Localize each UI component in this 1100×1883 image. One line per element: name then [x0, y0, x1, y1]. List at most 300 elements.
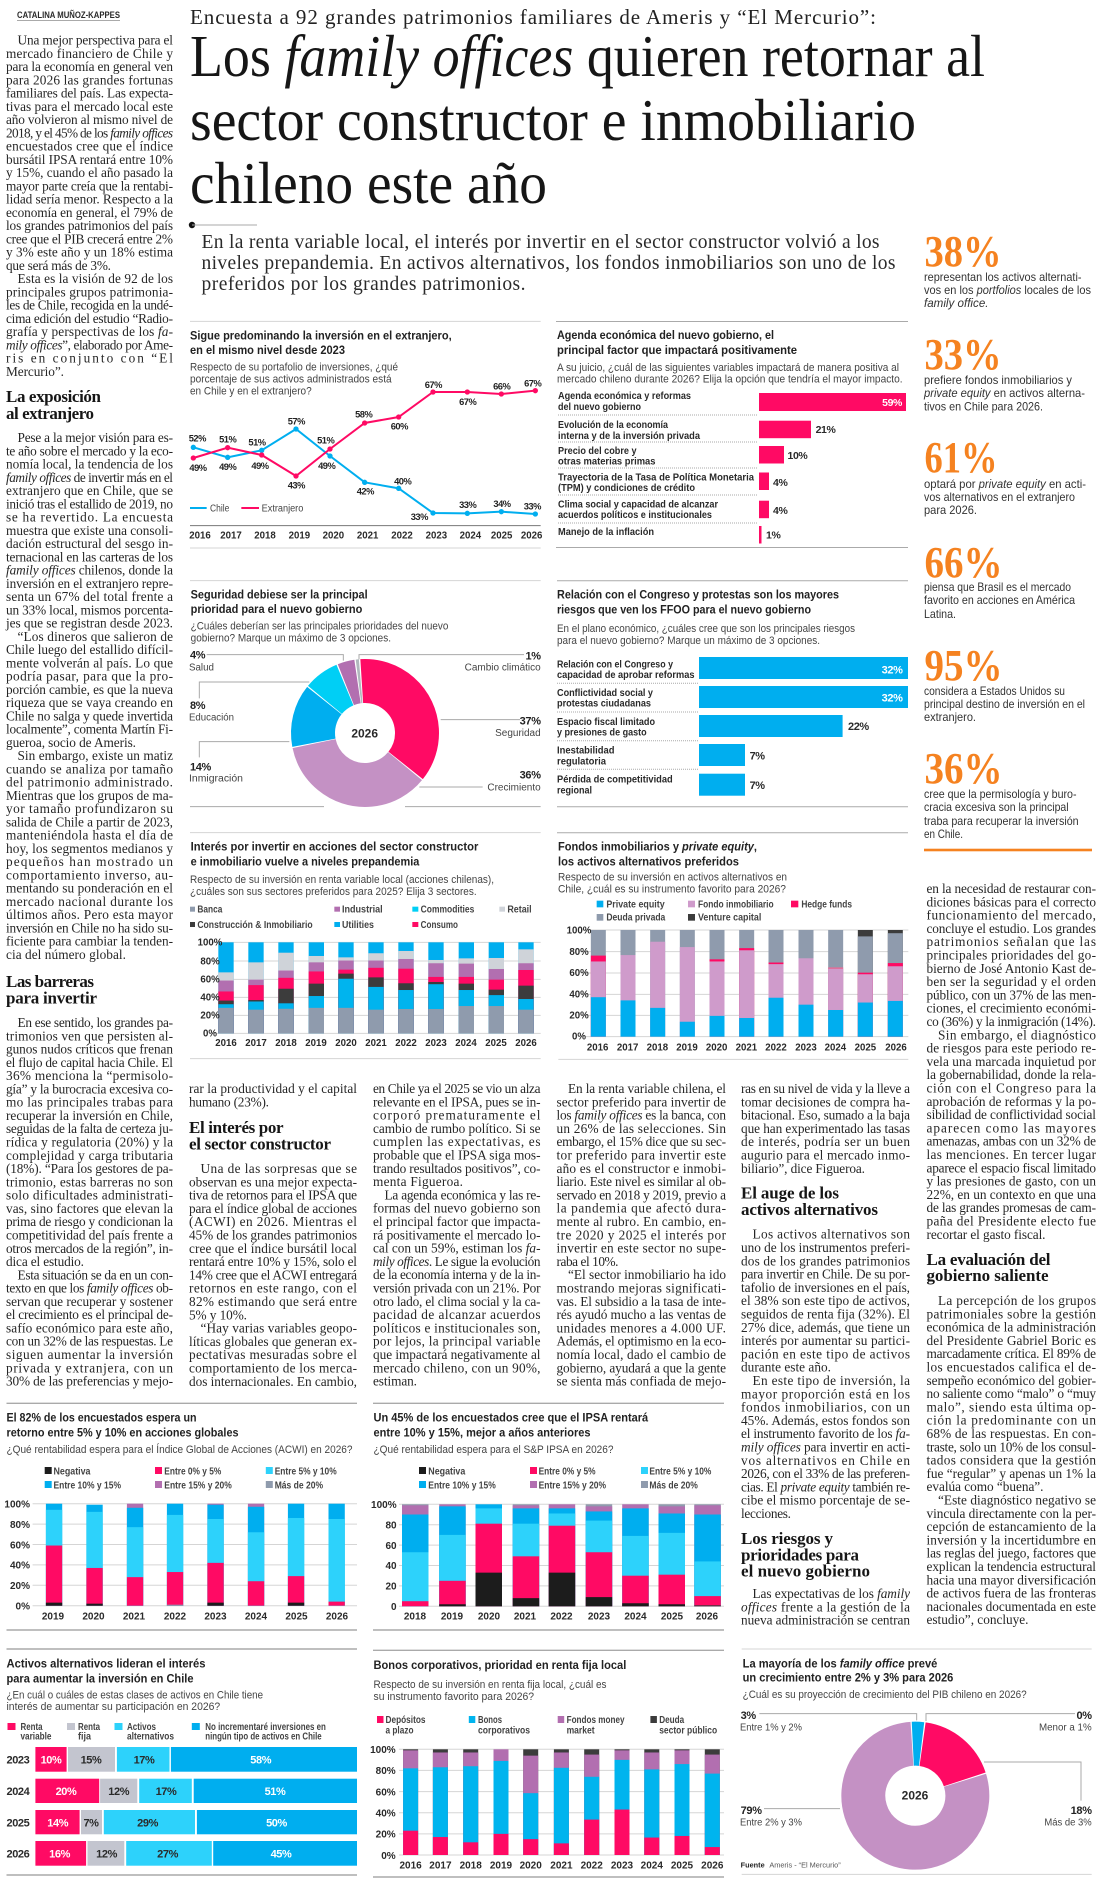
text block: column six top — [926, 881, 1097, 1242]
row labels: Manejo de la inflación — [558, 527, 654, 538]
text block: column four: raba el 10%. — [556, 1254, 618, 1269]
bars 2023: 10% — [41, 1754, 62, 1766]
text block: outgoing government: los encuestados califica el de- — [926, 1360, 1096, 1374]
panel: donut GDP growth: 2026 — [902, 1789, 929, 1803]
title: Los family offices quieren retornar al — [190, 23, 985, 89]
donut labels: 18% — [1071, 1805, 1092, 1817]
legend: Más de 20% — [275, 1480, 323, 1492]
text block: column three: trando resultados positivos”, co- — [373, 1161, 540, 1176]
year axis — [189, 530, 543, 541]
axis labels: 100% — [567, 925, 592, 936]
values: 59% — [882, 397, 903, 409]
text block: column four: tre 2020 y 2025 el interés por — [556, 1227, 727, 1242]
axis labels: 40% — [376, 1808, 396, 1820]
text block: column four: mostrando mejoras significati- — [556, 1280, 726, 1296]
leader lines — [759, 1714, 1081, 1809]
text block: alternative assets: mayor proporción está en los — [741, 1386, 910, 1401]
text block: column three: corporó prematuramente el — [373, 1108, 541, 1123]
legend: sector público — [659, 1726, 717, 1737]
axis labels: 2019 — [490, 1861, 513, 1872]
text block: outgoing government: económica de la administración — [926, 1320, 1096, 1335]
text block: column four: “El sector inmobiliario ha ido — [568, 1267, 726, 1282]
text block: exposure: inversión en Chile no ha sido su- — [6, 920, 173, 935]
text block: exposure: dación estructural del sesgo in- — [6, 536, 173, 551]
year axis: 2025 — [491, 530, 513, 541]
text block: intro column: cree que el PIB crecerá entre 2% — [6, 231, 173, 246]
axis labels: 2023 — [795, 1042, 817, 1053]
panel: ACWI expected return stacked bars: El 82% de los encuestados espera un — [6, 1410, 196, 1424]
legend: Negativa — [428, 1466, 466, 1478]
text block: outgoing government: las reglas del juego, factores que — [926, 1546, 1096, 1561]
text block: alternative assets: el 38% son este tipo de activos, — [741, 1293, 910, 1308]
row labels: Precio del cobre y — [558, 446, 637, 457]
donut labels: 36% — [520, 770, 541, 782]
text block: intro column: cima edición del estudio “Radio- — [6, 311, 173, 326]
text block: exposure: podría pasar, para que la pro- — [6, 668, 173, 684]
text block: barriers: texto en que los family offices ob- — [6, 1281, 173, 1296]
text block: column six top: diciones básicas para el correcto — [926, 894, 1096, 909]
heading: Los riesgos y prioridades — [741, 1529, 870, 1580]
text block: column three: La agenda económica y las re- — [384, 1187, 540, 1202]
text block: sector interest: dos internacionales. En cambio, — [189, 1374, 357, 1389]
legend: Venture capital — [698, 913, 762, 924]
stat 66%: piensa que Brasil es el mercado — [924, 580, 1071, 594]
donut labels: 8% — [190, 700, 206, 712]
panel: donut GDP growth — [740, 1649, 1092, 1874]
text block: column four: Además, el optimismo en la eco- — [556, 1334, 726, 1349]
bars 2023: 17% — [134, 1754, 155, 1766]
text block: alternative assets: uno de los instrumentos preferi- — [741, 1240, 910, 1255]
axis labels: 80% — [569, 947, 589, 958]
panel: IPSA expected return stacked bars: entre 10% y 15%, mejor a años anteriores — [374, 1425, 591, 1439]
axis labels: 100% — [371, 1500, 397, 1511]
text block: intro column: 2018, y el 45% de los family offices — [6, 125, 173, 140]
stacked bars — [46, 1504, 345, 1606]
data labels: 67% — [459, 397, 477, 407]
text block: column six top: de las grandes promesas de cam- — [926, 1200, 1096, 1215]
text block: intro column: para la economía en general ven — [6, 59, 173, 74]
text block: column three: el principal factor que impacta- — [373, 1214, 540, 1229]
text block: exposure: cia del número global. — [6, 947, 126, 962]
axis labels — [4, 1500, 349, 1622]
text block: exposure: nomía local, la tendencia de los — [6, 456, 173, 472]
text block: barriers: trimonio, estas barreras no son — [6, 1174, 173, 1189]
panel: ACWI expected return stacked bars — [4, 1403, 357, 1630]
text block: barriers: con un 32% de las respuestas. Le — [6, 1334, 173, 1349]
panel: ACWI expected return stacked bars: retorno entre 5% y 10% en acciones globales — [6, 1425, 239, 1439]
text block: column five top — [741, 1081, 910, 1176]
text block: outgoing government: cepción de estancamiento de la — [926, 1519, 1096, 1534]
bars 2026: 2026 — [6, 1848, 30, 1860]
bars 2024: 20% — [56, 1786, 77, 1798]
panel: agenda económica bar chart: principal factor que impactará positivamente — [557, 343, 797, 357]
subhead with dot marker: En la renta variable local, el interés por invertir en el sector constructor volvió a los — [202, 232, 880, 253]
axis labels: 2025 — [661, 1612, 684, 1622]
bars 2025: 7% — [83, 1818, 99, 1830]
data labels — [189, 379, 542, 522]
text block: barriers: complejidad y carga tributaria — [6, 1148, 173, 1163]
text block: exposure: riqueza que se vaya creando en — [6, 695, 173, 710]
text block: column three: que impactará negativamente al — [373, 1347, 541, 1362]
panel: risks bar chart: Relación con el Congreso y protestas son los mayores — [557, 588, 839, 602]
axis labels: 80% — [376, 1766, 396, 1777]
bars 2024: 2024 — [6, 1786, 31, 1798]
text block: exposure: mente volverán al país. Lo que — [6, 655, 173, 670]
text block: column six top: vela una marcada inquietud por — [926, 1054, 1097, 1069]
text block: column six top: las menciones. En tercer lugar — [926, 1147, 1097, 1162]
bars 2025: 14% — [47, 1818, 69, 1830]
text block: outgoing government: del Presidente Gabriel Boric es — [926, 1333, 1096, 1348]
axis labels: 40 — [385, 1561, 397, 1572]
text block: alternative assets: dos de los grandes patrimonios — [741, 1253, 910, 1268]
text block: alternative assets: cibe el mismo porcentaje de se- — [741, 1493, 910, 1508]
heading: Las barreras para invertir: Las barreras — [6, 972, 94, 991]
panel: IPSA expected return stacked bars: ¿Qué rentabilidad espera para el S&P IPSA en 2026? — [374, 1444, 614, 1456]
stat 61%: optará por private equity en acti- — [924, 477, 1086, 491]
axis labels: 2019 — [676, 1042, 698, 1053]
legend: Chile — [210, 503, 230, 514]
row labels: Relación con el Congreso y — [557, 659, 673, 670]
text block: column four: nomía local, dado el cambio de — [556, 1347, 726, 1362]
text block: column four: servado en 2018 y 2019, previo a — [556, 1187, 726, 1202]
text block: alternative assets: 27% dice, además, que tiene un — [741, 1320, 910, 1335]
text block: column three: formas del nuevo gobierno son — [373, 1201, 541, 1216]
panel: activos alternativos horizontal stacked bars: interés de aumentar su participación en 2026? — [6, 1701, 220, 1713]
data labels: 67% — [524, 379, 542, 389]
text block: exposure: family offices de invertir más en el — [6, 470, 173, 485]
text block: column five top: tomar decisiones de compra ha- — [741, 1094, 910, 1109]
subhead with dot marker: niveles prepandemia. En activos alternativos, los fondos inmobiliarios son uno de los — [202, 253, 896, 274]
legend: Entre 10% y 15% — [54, 1480, 121, 1492]
bars 2023: 15% — [81, 1754, 102, 1766]
values: 22% — [848, 721, 869, 733]
legend: Entre 15% y 20% — [539, 1480, 606, 1492]
text block: risks: nueva administración se centran — [741, 1613, 910, 1628]
row labels — [557, 659, 695, 797]
stacked bars — [218, 942, 534, 1033]
text block: exposure: Sin embargo, existe un matiz — [18, 748, 173, 763]
panel: construction sector stacked bars: Interés por invertir en acciones del sector constructor — [191, 840, 479, 854]
text block: column six top: recortar el gasto fiscal. — [926, 1227, 1046, 1242]
panel: line chart foreign vs local investment: en Chile y en el extranjero? — [190, 386, 312, 398]
year axis: 2026 — [521, 530, 543, 541]
axis labels: 100% — [4, 1500, 30, 1510]
stat 61% — [924, 433, 1086, 517]
axis labels: 2021 — [123, 1612, 146, 1622]
data labels: 43% — [288, 481, 306, 491]
row labels: regional — [557, 786, 592, 797]
axis labels — [567, 925, 907, 1053]
axis labels: 60% — [569, 968, 589, 979]
stat 36%: cracia excesiva son la principal — [924, 800, 1069, 814]
donut labels: Entre 1% y 2% — [740, 1722, 802, 1733]
bars 2025 — [6, 1810, 357, 1834]
text block: outgoing government: “Este diagnóstico negativo se — [938, 1492, 1096, 1508]
row labels: regulatoria — [557, 756, 606, 767]
axis labels: 2016 — [399, 1861, 422, 1872]
text block: outgoing government: La percepción de los grupos — [938, 1293, 1096, 1308]
donut labels: 14% — [190, 762, 212, 774]
legend: Activos — [127, 1722, 156, 1733]
values: 4% — [773, 505, 788, 517]
legend: Entre 0% y 5% — [539, 1466, 596, 1478]
stat 33%: private equity en activos alterna- — [923, 386, 1085, 400]
panel: activos alternativos horizontal stacked bars: Activos alternativos lideran el interés — [6, 1656, 206, 1670]
year axis: 2024 — [460, 530, 482, 541]
axis labels: 0% — [381, 1851, 396, 1862]
text block: intro column: que será más de 3%. — [6, 258, 111, 273]
text block: intro column: familiares del país. Las expecta- — [6, 86, 173, 100]
text block: exposure: inició tras el estallido de 2019, no — [6, 496, 173, 511]
text block: sector interest: cree que el índice bursátil local — [189, 1241, 357, 1256]
text block: column three: relevante en el IPSA, pues se in- — [373, 1094, 540, 1109]
values — [766, 397, 903, 542]
text block: intro column: bursátil IPSA rentará entre 10% — [6, 152, 173, 167]
text block: column six top: funcionamiento del mercado, — [926, 908, 1096, 923]
values: 7% — [750, 780, 765, 792]
panel: alternative assets stacked bars: Respecto de su inversión en activos alternativos en — [558, 871, 787, 883]
data labels: 52% — [189, 434, 207, 444]
text block: exposure: mentando su ponderación en el — [6, 880, 173, 896]
legend: alternativos — [127, 1732, 174, 1742]
panel: agenda económica bar chart — [556, 322, 908, 548]
panel: activos alternativos horizontal stacked bars: para aumentar la inversión en Chile — [6, 1671, 194, 1685]
axis labels: 2021 — [736, 1042, 758, 1053]
text block: column two top: rar la productividad y el capital — [189, 1081, 357, 1096]
text block: column three — [373, 1081, 541, 1389]
axis labels: 60% — [376, 1787, 396, 1798]
donut labels: 1% — [525, 650, 541, 662]
text block: alternative assets — [741, 1227, 910, 1521]
legend: Retail — [507, 905, 532, 916]
text block: exposure: un 33% local, mismos porcenta- — [6, 602, 173, 617]
text block: intro column: mily offices”, elaborado por Ame- — [6, 337, 173, 352]
text block: outgoing government: vincula directamente con la per- — [926, 1506, 1096, 1521]
legend: Entre 5% y 10% — [649, 1466, 711, 1478]
text block: column two top: humano (23%). — [189, 1094, 269, 1109]
row labels: Pérdida de competitividad — [557, 775, 673, 786]
text block: column five top: augurio para el mercado inmo- — [741, 1148, 910, 1162]
text block: column four — [556, 1081, 727, 1389]
panel: line chart foreign vs local investment — [189, 321, 543, 548]
text block: alternative assets: tafolio de inversiones en el país, — [741, 1280, 910, 1295]
axis labels: 2019 — [305, 1038, 327, 1049]
legend — [190, 905, 532, 931]
panel: donut GDP growth: La mayoría de los family office prevé — [743, 1656, 938, 1670]
bars — [759, 393, 906, 544]
text block: column six top: ción con el Congreso para la — [926, 1080, 1096, 1096]
text block: column six top: paña del Presidente electo fue — [926, 1214, 1096, 1228]
text block: exposure: últimos años. Pero esta mayor — [6, 907, 174, 922]
year axis: 2018 — [254, 530, 276, 541]
text block: column six top: Sin embargo, el diagnóstico — [938, 1027, 1096, 1042]
legend: Entre 15% y 20% — [164, 1480, 232, 1492]
stat 95% — [924, 641, 1085, 724]
stat 36%: en Chile. — [924, 827, 963, 841]
axis labels: 2019 — [42, 1612, 65, 1622]
stat 33% — [923, 330, 1085, 414]
text block: sector interest: 14% cree que el ACWI entregará — [189, 1267, 357, 1282]
donut labels: Educación — [189, 712, 234, 723]
text block: outgoing government: patrimoniales sobre la gestión — [926, 1306, 1096, 1321]
text block: sector interest: comportamiento de los merca- — [189, 1360, 357, 1376]
text block: column four: liario. Este nivel es similar al ob- — [556, 1174, 726, 1189]
heading: Las barreras para invertir — [6, 972, 97, 1008]
year axis: 2021 — [357, 530, 379, 541]
text block: alternative assets: el instrumento favorito de los fa- — [741, 1426, 910, 1441]
text block: intro column: los grandes patrimonios del país — [6, 218, 173, 233]
values: 21% — [816, 424, 836, 436]
text block: exposure: gueroa, socio de Ameris. — [6, 735, 136, 750]
axis labels: 2016 — [587, 1042, 609, 1053]
legend: Industrial — [342, 905, 383, 916]
panel: alternative assets stacked bars: Chile, ¿cuál es su instrumento favorito para 2026? — [558, 883, 786, 895]
stat 61%: 61% — [924, 433, 998, 482]
data labels: 40% — [394, 476, 412, 486]
values: 32% — [882, 665, 903, 677]
text block: intro column: grafía y perspectivas de los fa- — [6, 324, 173, 339]
legend: Deuda privada — [606, 913, 666, 924]
legend: Bonos — [478, 1715, 502, 1726]
text block: barriers: siguen aumentar la inversión — [6, 1347, 173, 1362]
text block: intro column: economía en general, el 79% de — [6, 205, 173, 220]
panel: line chart foreign vs local investment: Respecto de su portafolio de inversiones, ¿qué — [190, 362, 398, 374]
text block: column three: por lejos, la principal variable — [373, 1334, 541, 1349]
axis labels: 2020 — [335, 1038, 357, 1049]
text block: intro column: ris en conjunto con “El — [6, 350, 173, 366]
text block: column three: rá positivamente el mercado lo- — [373, 1227, 540, 1242]
data labels: 33% — [411, 512, 429, 522]
axis labels: 80 — [385, 1520, 397, 1531]
text block: exposure: “Los dineros que salieron de — [18, 629, 173, 644]
text block: barriers: 36% menciona la “permisolo- — [6, 1068, 173, 1083]
axis labels: 20% — [10, 1581, 30, 1592]
row labels: del nuevo gobierno — [558, 402, 641, 413]
text block: column six top: co (36%) y la inmigración (14%). — [926, 1014, 1096, 1029]
axis labels: 2017 — [617, 1042, 638, 1053]
axis labels: 2026 — [701, 1861, 724, 1872]
text block: intro column: lidad sería menor. Respecto a la — [6, 192, 173, 206]
legend: Entre 0% y 5% — [164, 1466, 221, 1478]
stat 61%: para 2026. — [924, 503, 977, 517]
axis labels: 2020 — [478, 1612, 501, 1622]
panel: donut government priorities: gobierno? Marque un máximo de 3 opciones. — [191, 633, 391, 645]
text block: sector interest: líticas globales que generan ex- — [189, 1334, 357, 1349]
donut labels: Crecimiento — [487, 782, 541, 793]
text block: exposure: extranjero que en Chile, que se — [6, 483, 173, 498]
axis labels: 60% — [10, 1540, 30, 1551]
stat 66%: 66% — [924, 538, 1002, 587]
axis labels: 0 — [391, 1602, 397, 1613]
donut labels: 4% — [190, 650, 206, 662]
text block: intro column: principales grupos patrimonia- — [6, 284, 173, 299]
text block: column four: invertir en este sector no supe- — [556, 1241, 726, 1256]
axis labels: 60 — [385, 1541, 397, 1552]
text block: column three: otro lado, el clima social y la ca- — [373, 1294, 540, 1309]
text block: outgoing government: hacia una mayor diversificación — [926, 1572, 1096, 1587]
text block: risks — [741, 1586, 910, 1628]
heading: Los riesgos y prioridades: prioridades para — [741, 1546, 860, 1564]
text block: exposure: pequeños han mostrado un — [6, 854, 173, 869]
heading: El interés por el sector constructor: el sector constructor — [189, 1134, 331, 1154]
bars 2023: 58% — [250, 1754, 272, 1766]
text block: barriers: privada y extranjera, con un — [6, 1360, 173, 1375]
heading: El auge de los activos alternativos: El auge de los — [741, 1184, 839, 1202]
text block: barriers: 30% de las preferencias y mejo- — [6, 1374, 173, 1389]
text block: exposure: del patrimonio administrado. — [6, 774, 173, 790]
donut labels: 0% — [1076, 1710, 1092, 1722]
row labels: acuerdos políticos e institucionales — [558, 510, 712, 521]
axis labels: 0% — [203, 1029, 217, 1040]
text block: exposure: cuando se analiza por tamaño — [6, 761, 173, 776]
axis labels: 2018 — [460, 1861, 482, 1872]
legend: Renta — [78, 1722, 100, 1733]
text block: exposure: family offices chilenos, donde la — [6, 562, 173, 578]
text block: column three: políticos e institucionales son, — [373, 1320, 540, 1335]
axis labels: 2025 — [855, 1042, 877, 1053]
values: 7% — [750, 751, 765, 763]
bars 2026: 45% — [271, 1848, 292, 1860]
legend: corporativos — [478, 1726, 530, 1737]
values: 10% — [788, 450, 808, 462]
axis labels: 2021 — [514, 1612, 537, 1622]
row labels: protestas ciudadanas — [557, 699, 651, 710]
axis labels: 2021 — [365, 1038, 387, 1049]
text block: barriers: mo las principales trabas para — [6, 1095, 173, 1110]
legend: Construcción & Inmobiliario — [197, 920, 313, 931]
text block: barriers: solo dificultades administrati- — [6, 1188, 173, 1203]
legend: Consumo — [421, 920, 458, 931]
text block: exposure: localmente”, comenta Martín Fi- — [6, 722, 173, 736]
stacked bars — [402, 1504, 721, 1606]
row labels — [558, 391, 754, 538]
text block: sector interest: para el índice global de acciones — [189, 1201, 357, 1216]
year axis: 2019 — [289, 530, 311, 541]
stat 36%: cree que la permisología y buro- — [924, 787, 1076, 801]
text block: column five top: que han experimentado las tasas — [741, 1121, 910, 1136]
text block: alternative assets: seguidos de renta fija (32%). El — [741, 1306, 910, 1322]
axis labels: 80% — [200, 956, 220, 967]
axis labels: 20% — [376, 1830, 396, 1841]
text block: column four: unidades menores a 4.000 UF. — [556, 1320, 726, 1335]
text block: column three: en Chile ya el 2025 se vio un alza — [373, 1081, 541, 1096]
axis labels: 2026 — [885, 1042, 907, 1053]
text block: column three: pacidad de alcanzar acuerdos — [373, 1307, 540, 1322]
text block: column six top: concluye el estudio. Los grandes — [926, 921, 1096, 936]
row labels: Conflictividad social y — [557, 688, 653, 699]
text block: barriers: gía” y la burocracia excesiva co- — [6, 1081, 173, 1096]
stat 36% — [924, 744, 1079, 841]
heading: La exposición al extranjero: La exposición — [6, 387, 102, 406]
heading: El auge de los activos alternativos — [741, 1184, 878, 1219]
stat 38%: representan los activos alternati- — [924, 270, 1082, 284]
panel: bonos corporativos stacked bars: su instrumento favorito para 2026? — [374, 1691, 534, 1703]
stacked bars — [403, 1749, 720, 1855]
heading: Las barreras para invertir: para invertir — [6, 988, 97, 1008]
stat 66% — [924, 538, 1075, 621]
text block: sector interest: observan es una mejor expecta- — [189, 1174, 357, 1189]
text block: column three: probable que el IPSA siga mos- — [373, 1148, 540, 1162]
text block: barriers — [6, 1015, 174, 1389]
text block: column four: tor preferido para invertir este — [556, 1148, 726, 1162]
legend: Fondos money — [567, 1715, 625, 1726]
text block: intro column: y 3% este año y un 18% estima — [6, 244, 173, 260]
data labels: 49% — [219, 462, 237, 472]
text block: barriers: servan que recuperar y sostener — [6, 1294, 174, 1309]
text block: exposure: Chile luego del estallido difícil- — [6, 642, 173, 657]
year axis: 2017 — [220, 530, 242, 541]
bars 2025: 29% — [137, 1818, 159, 1830]
